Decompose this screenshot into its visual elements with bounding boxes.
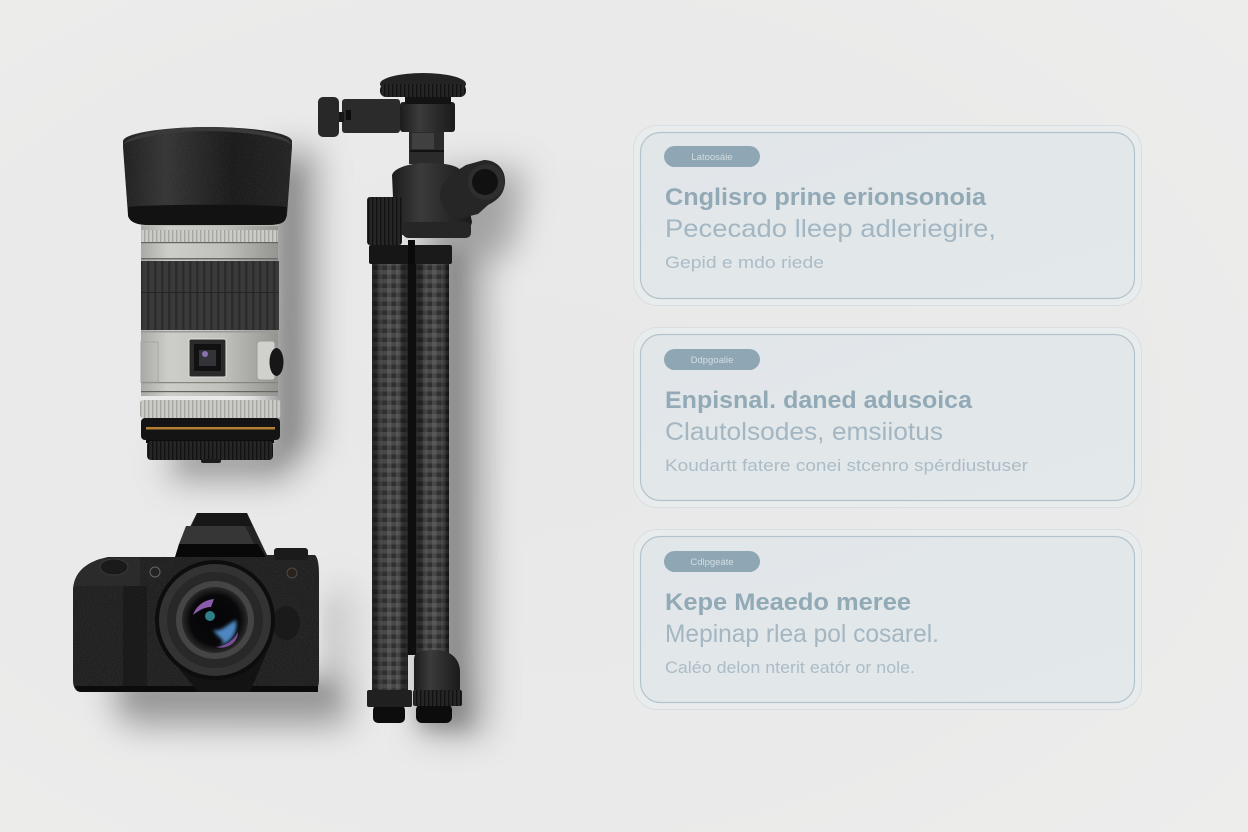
- tripod ball head: [367, 130, 472, 245]
- camera body: [70, 510, 322, 695]
- camera prism: [175, 513, 266, 557]
- tripod side knob: [440, 160, 505, 219]
- lens hood: [123, 127, 292, 226]
- subheading: Pececado lleep adleriegire,: [665, 215, 996, 243]
- lens: [120, 125, 296, 463]
- tripod legs: [372, 255, 449, 692]
- tripod: [318, 73, 505, 723]
- tripod shadow: [420, 170, 525, 735]
- badge: Cdlpgeáte: [690, 557, 734, 568]
- badge: [664, 349, 760, 370]
- badge: Latoosáie: [691, 152, 733, 163]
- lens focus rings: [140, 400, 281, 463]
- subheading: Clautolsodes, emsiiotus: [665, 418, 943, 446]
- badge: [664, 146, 760, 167]
- panel: card 3: [634, 530, 1142, 710]
- heading: Enpisnal. daned adusoica: [665, 387, 973, 414]
- heading: Kepe Meaedo meree: [665, 589, 911, 616]
- lens barrel: [141, 226, 279, 396]
- badge: Ddpgoalie: [691, 355, 733, 366]
- heading: Cnglisro prine erionsonoia: [665, 184, 987, 211]
- lens window: [189, 339, 226, 377]
- lens shadow: [170, 150, 316, 480]
- panel: card 1: [634, 126, 1142, 306]
- description: Caléo delon nterit eatór or nole.: [665, 658, 915, 677]
- tripod top clamp: [318, 73, 466, 137]
- panel: card 2: [634, 328, 1142, 508]
- lens side switch: [257, 341, 284, 380]
- camera dials: [100, 548, 308, 640]
- tripod leg collars: [369, 240, 452, 264]
- camera shadow: [105, 575, 348, 725]
- badge: [664, 551, 760, 572]
- camera: [70, 510, 322, 695]
- description: Gepid e mdo riede: [665, 253, 824, 272]
- description: Koudartt fatere conei stcenro spérdiustuser: [665, 456, 1028, 475]
- tripod feet: [367, 650, 462, 723]
- camera lens: [155, 560, 275, 692]
- subheading: Mepinap rlea pol cosarel.: [665, 620, 939, 648]
